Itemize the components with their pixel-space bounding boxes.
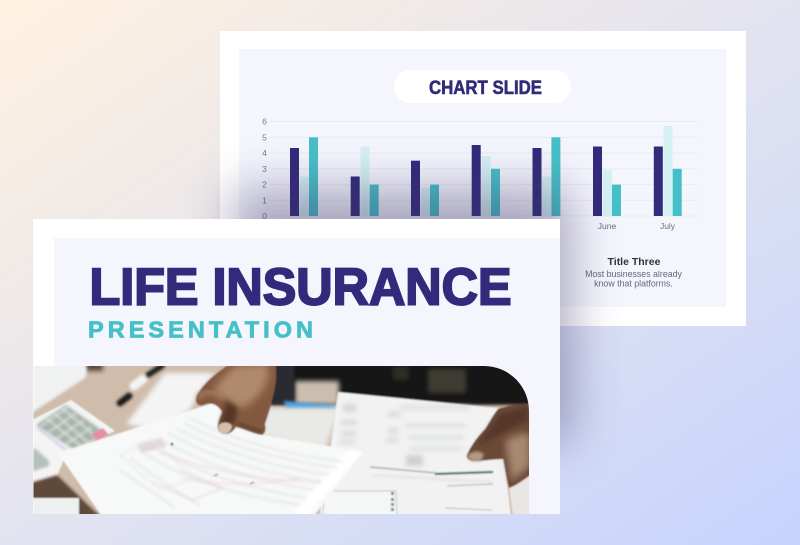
dark desk lower-left (34, 473, 100, 514)
front slide shadow (232, 188, 572, 443)
front slide white frame (33, 219, 560, 514)
text block: title three: Title Three (608, 256, 661, 268)
front slide: title slide (20, 219, 560, 530)
marker pen (120, 366, 162, 403)
right paper (318, 392, 512, 525)
y axis labels: 0 (262, 211, 267, 221)
chart title pill: CHART SLIDE (429, 78, 542, 99)
text block: title three (585, 256, 683, 288)
y axis labels: 4 (262, 148, 267, 158)
teal bars series (309, 137, 682, 216)
back slide: chart slide (220, 31, 746, 326)
top-left paper (34, 366, 89, 413)
dark bars series (290, 145, 663, 216)
text block: title three: know that platforms. (594, 278, 673, 288)
back slide inner panel (239, 49, 726, 307)
left hand (196, 360, 276, 435)
photo: hands reviewing insurance papers (34, 366, 529, 514)
y axis labels: 6 (262, 116, 267, 126)
y axis labels: 1 (262, 195, 267, 205)
desk surface (34, 366, 524, 514)
bar chart (262, 116, 698, 231)
calculator (28, 400, 115, 484)
y axis labels: 3 (262, 164, 267, 174)
x axis labels: June (598, 221, 616, 231)
text block: title three: Most businesses already (585, 269, 683, 279)
dark background area (84, 366, 528, 410)
light bars series (300, 126, 672, 216)
small paper lower-left (34, 496, 80, 514)
chart title pill (394, 70, 571, 103)
y axis labels: 2 (262, 180, 267, 190)
main title: LIFE INSURANCE (90, 258, 512, 316)
y axis labels (262, 116, 267, 221)
y axis labels: 5 (262, 132, 267, 142)
x axis labels (598, 221, 676, 231)
back slide white frame (220, 31, 746, 326)
right hand (467, 403, 535, 488)
main form paper (62, 402, 362, 514)
x axis labels: July (660, 221, 676, 231)
subtitle: PRESENTATION (88, 316, 313, 342)
bottom right surface (508, 475, 529, 514)
front slide inner panel (54, 238, 560, 514)
paper behind left hand (126, 373, 215, 430)
mid background table papers (262, 404, 336, 446)
